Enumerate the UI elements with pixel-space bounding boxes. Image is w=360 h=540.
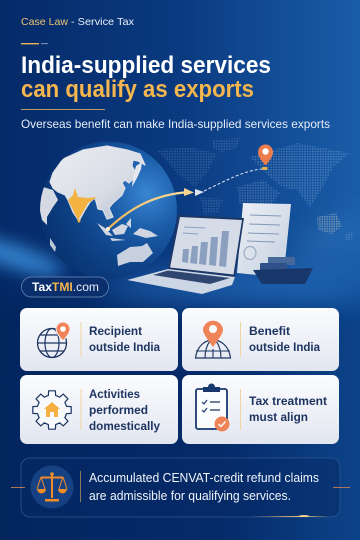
title xyxy=(21,52,271,103)
icon: pin over globe xyxy=(196,321,230,358)
icon: globe with pin xyxy=(38,322,70,358)
subtitle: Overseas benefit can make India-supplied services exports xyxy=(21,117,330,131)
land: Australia xyxy=(117,243,153,266)
callout text: Accumulated CENVAT-credit refund claims xyxy=(89,471,319,485)
card text: Recipient xyxy=(89,324,142,338)
laptop illustration xyxy=(127,215,244,294)
panel: callout xyxy=(11,458,350,517)
land: Japan xyxy=(132,162,142,187)
eyebrow: case law label xyxy=(21,16,135,28)
logo: TaxTMI.com xyxy=(22,277,108,297)
callout text: are admissible for qualifying services. xyxy=(89,489,291,503)
icon: scales of justice xyxy=(30,466,74,508)
card text: outside India xyxy=(89,340,160,354)
land: Africa xyxy=(38,187,58,225)
arrow: export route xyxy=(106,169,263,231)
India highlight xyxy=(68,188,97,220)
globe illustration xyxy=(40,142,177,266)
icon: gear with house xyxy=(33,391,71,429)
land: Asia xyxy=(50,146,145,221)
logo: TaxTMI.com: TaxTMI.com xyxy=(32,280,99,294)
card text: Tax treatment xyxy=(249,394,327,408)
dotted world map xyxy=(157,138,353,240)
card text: domestically xyxy=(89,419,160,433)
panel: activities performed domestically xyxy=(20,375,178,444)
card text: Activities xyxy=(89,387,140,401)
document illustration xyxy=(237,203,291,275)
card text: performed xyxy=(89,403,148,417)
panel: recipient outside India xyxy=(20,308,178,371)
callout text xyxy=(89,471,319,503)
card text xyxy=(89,324,160,354)
card text xyxy=(249,324,320,354)
card text xyxy=(249,394,327,424)
panel: tax treatment must align xyxy=(182,375,339,444)
title: India-supplied services xyxy=(21,52,271,79)
card text: Benefit xyxy=(249,324,290,338)
eyebrow: case law label: Case Law xyxy=(21,16,68,28)
icon: destination pin xyxy=(258,145,273,170)
card text: must align xyxy=(249,410,308,424)
card text xyxy=(89,387,160,433)
eyebrow: case law label: - Service Tax xyxy=(71,16,135,28)
card text: outside India xyxy=(249,340,320,354)
icon: clipboard with checks xyxy=(196,384,230,432)
panel: benefit outside India xyxy=(182,308,339,371)
land: Indonesia xyxy=(97,218,158,241)
ship illustration xyxy=(253,257,313,284)
title: can qualify as exports xyxy=(21,76,254,103)
